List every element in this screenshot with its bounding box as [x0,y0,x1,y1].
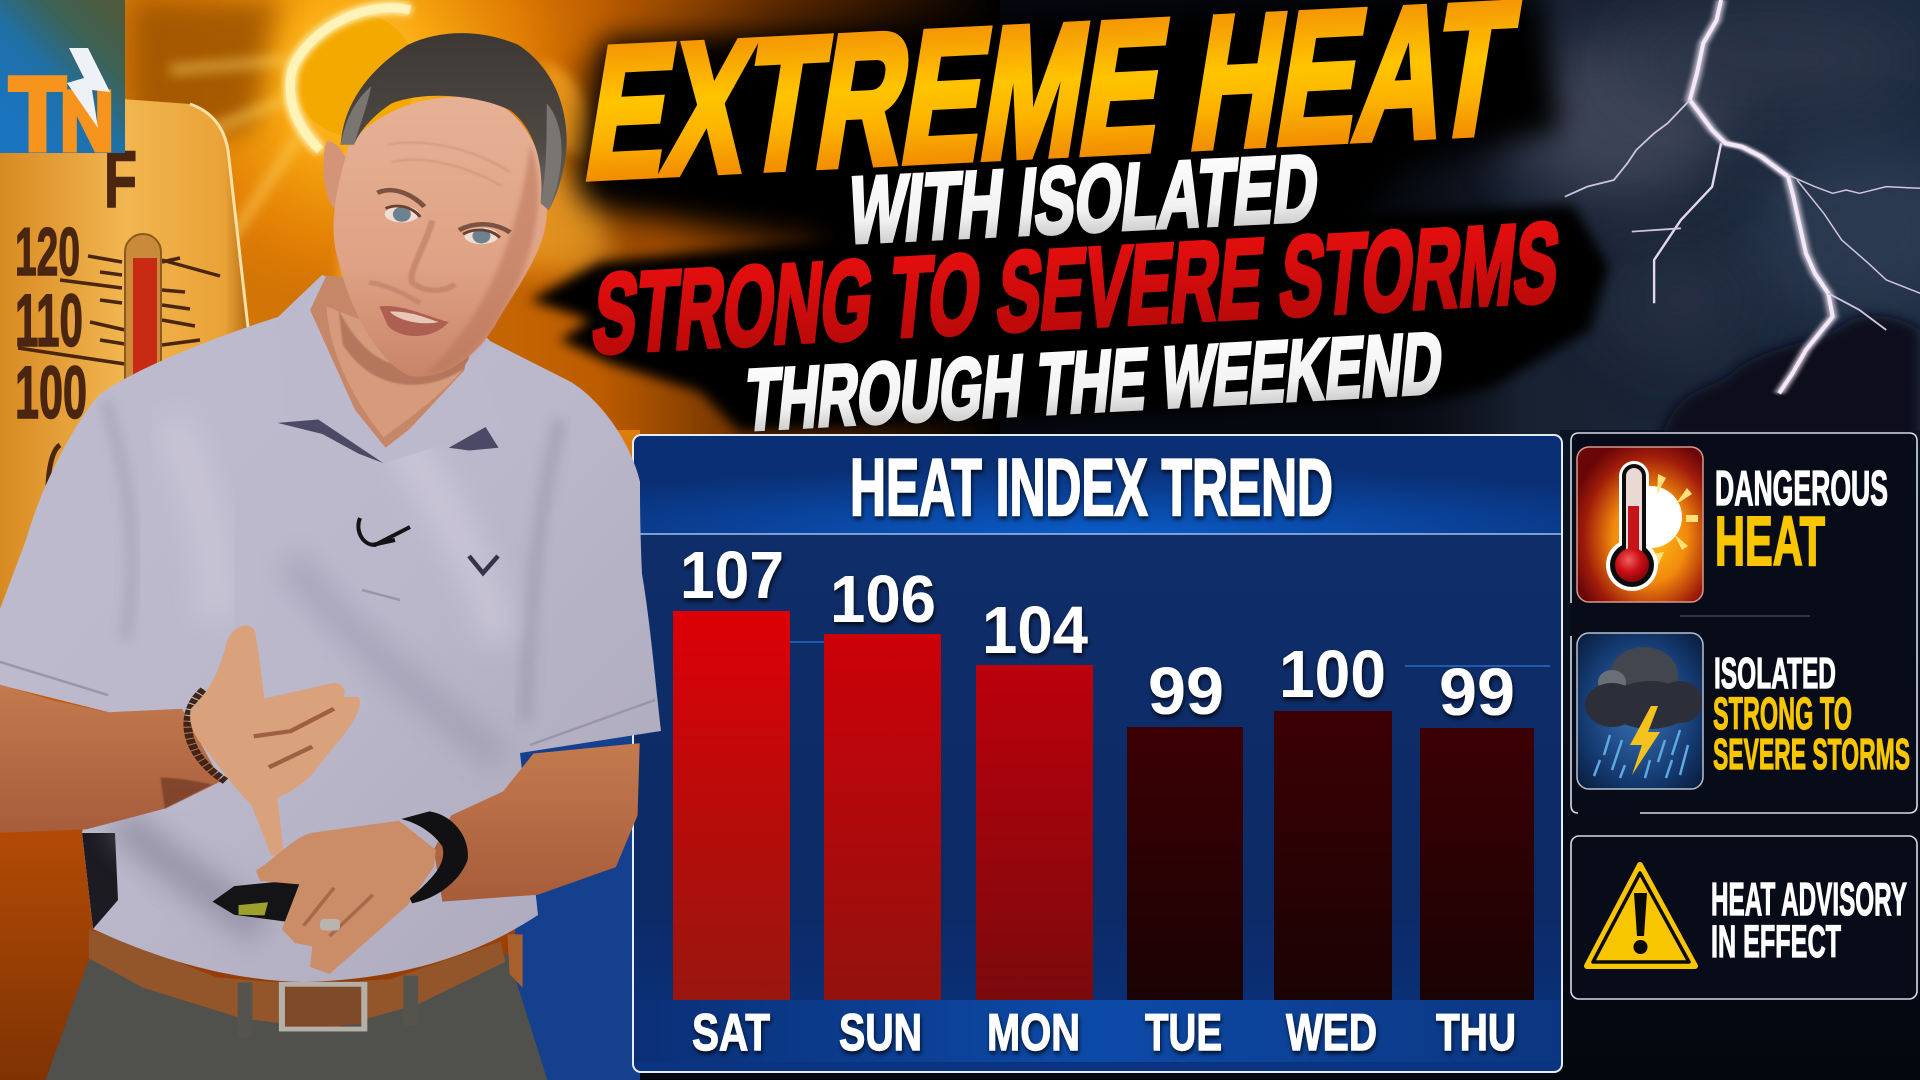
alert text: heat advisory in effect [1711,873,1907,967]
remote control [213,879,312,922]
neck and face [277,33,567,463]
headline line 4: THROUGH THE WEEKEND [741,315,1447,449]
right forearm [434,743,640,902]
bar: Wednesday 100: 100 [1279,637,1386,712]
bar: Saturday 107: SAT [692,1004,770,1062]
bar: Sunday 106: SUN [839,1004,922,1062]
pointing hand [190,626,360,857]
bar: Tuesday 99 [1127,654,1243,1062]
hair [341,33,567,210]
logo: TN [0,0,125,173]
panel: heat advisory [1571,836,1917,999]
alert text: isolated strong to severe storms [1713,649,1910,779]
microphone and shirt logo [358,518,410,545]
mouth [379,306,449,336]
thermometer scale numbers: 120 [15,214,80,290]
icon: thermometer and sun [1577,447,1703,602]
icon: storm cloud with lightning [1577,633,1703,789]
bar: Sunday 106: 106 [830,562,936,637]
thermometer scale numbers: 110 [15,279,83,362]
sun with glowing ring [125,0,660,340]
bar: Sunday 106 [824,562,941,1062]
belt [89,929,523,1038]
logo: TN: T [9,56,66,173]
wristwatch [401,811,468,903]
panel: weather alerts [1571,433,1917,813]
shirt folds and shading [0,400,655,930]
bar: Thursday 99: THU [1436,1004,1516,1062]
chart title: HEAT INDEX TREND [850,443,1333,533]
panel: heat index trend chart [633,435,1562,1072]
logo: TN: N [60,74,114,168]
bar: Monday 104: 104 [982,593,1088,668]
bar: Tuesday 99: TUE [1145,1004,1222,1062]
title brush backing [530,0,1609,432]
left arm and bracelet [0,685,221,833]
thermometer scale numbers: F [104,135,137,225]
thermometer scale numbers [15,135,137,490]
bar: Saturday 107: 107 [680,538,784,613]
presenter [0,33,661,1080]
nose [411,220,455,290]
lightning bolt [1565,0,1920,393]
bar chart [673,538,1534,1062]
arms and hands [0,626,640,974]
eyes and brows [377,190,510,244]
bar: Thursday 99 [1420,655,1534,1062]
headline [575,0,1565,449]
bar: Saturday 107 [673,538,790,1062]
thermometer scale numbers: 100 [15,351,87,434]
face [334,97,547,377]
trousers [46,953,547,1080]
alert text: dangerous heat: HEAT [1715,502,1825,580]
shirt collar [277,276,502,463]
lower hand [256,821,436,974]
bar: Thursday 99: 99 [1439,655,1515,730]
polo shirt [0,275,661,982]
thermometer dial [0,90,250,640]
ear [323,141,351,209]
bar: Wednesday 100: WED [1286,1004,1377,1062]
bar: Monday 104 [976,593,1093,1062]
alert text: dangerous heat [1715,462,1888,580]
icon: warning triangle [1587,865,1695,966]
headline line 2: WITH ISOLATED [844,135,1324,264]
bar: Wednesday 100 [1274,637,1392,1062]
storm clouds and lightning [1510,0,1920,440]
bar: Tuesday 99: 99 [1148,654,1224,729]
bar: Monday 104: MON [987,1004,1080,1062]
